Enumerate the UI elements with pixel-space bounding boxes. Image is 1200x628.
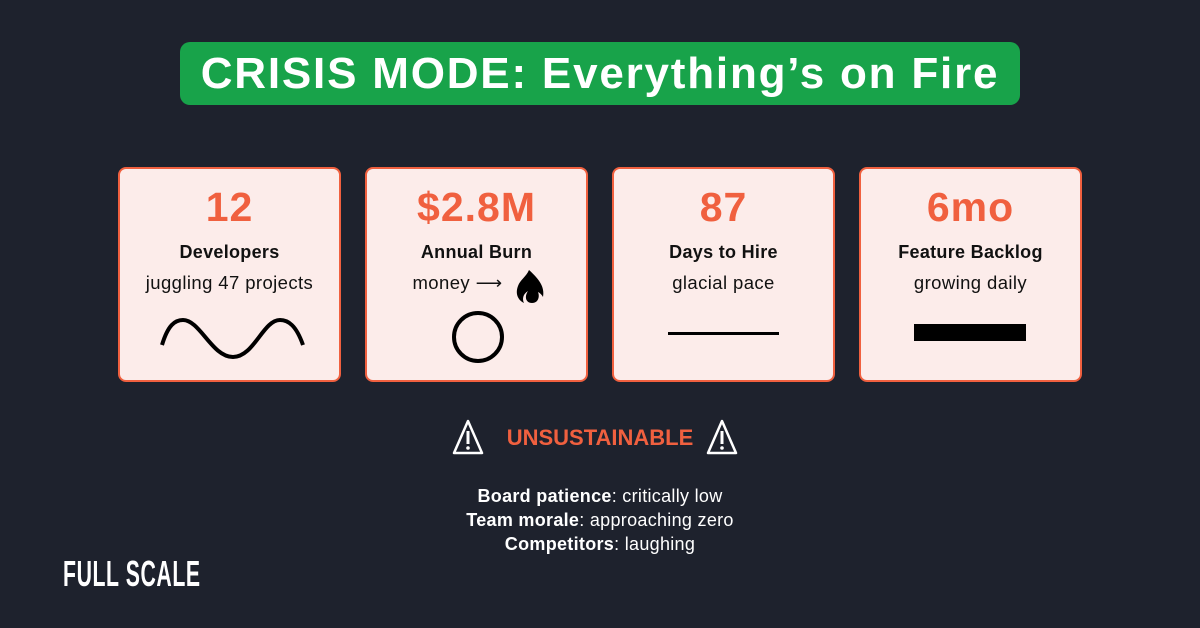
- icon: warning right: [706, 420, 738, 454]
- number: 12: 12: [206, 184, 253, 230]
- icon: warning left: [452, 420, 484, 454]
- text: unsustainable: UNSUSTAINABLE: [507, 425, 693, 450]
- label: developers: Developers: [179, 242, 280, 262]
- panel: developers: [118, 167, 341, 382]
- subtext: growing daily: growing daily: [914, 272, 1027, 293]
- subtext: glacial pace: glacial pace: [672, 272, 775, 293]
- status lines: Team morale: approaching zero: [466, 510, 734, 530]
- panel: annual burn: [365, 167, 588, 382]
- panel: feature backlog: [859, 167, 1082, 382]
- status lines: [466, 486, 734, 554]
- label: annual burn: Annual Burn: [421, 242, 532, 262]
- warning heading: [452, 420, 738, 454]
- subtext: juggling: juggling 47 projects: [146, 272, 313, 293]
- title: CRISIS MODE: Everything’s on Fire: [201, 49, 999, 98]
- logo: FULL SCALE: [63, 553, 201, 594]
- subtext: money to fire: money ⟶: [412, 272, 502, 293]
- icon: bar: [914, 324, 1026, 341]
- label: feature backlog: Feature Backlog: [898, 242, 1043, 262]
- label: days to hire: Days to Hire: [669, 242, 778, 262]
- icon: flat line: [668, 332, 779, 335]
- number: 87: 87: [700, 184, 747, 230]
- number: 6mo: 6mo: [927, 184, 1014, 230]
- number: 2.8M: $2.8M: [417, 184, 536, 230]
- icon: fire: [452, 270, 544, 363]
- status lines: Board patience: critically low: [477, 486, 723, 506]
- status lines: Competitors: laughing: [505, 534, 695, 554]
- panel: days to hire: [612, 167, 835, 382]
- icon: sine wave: [160, 318, 305, 359]
